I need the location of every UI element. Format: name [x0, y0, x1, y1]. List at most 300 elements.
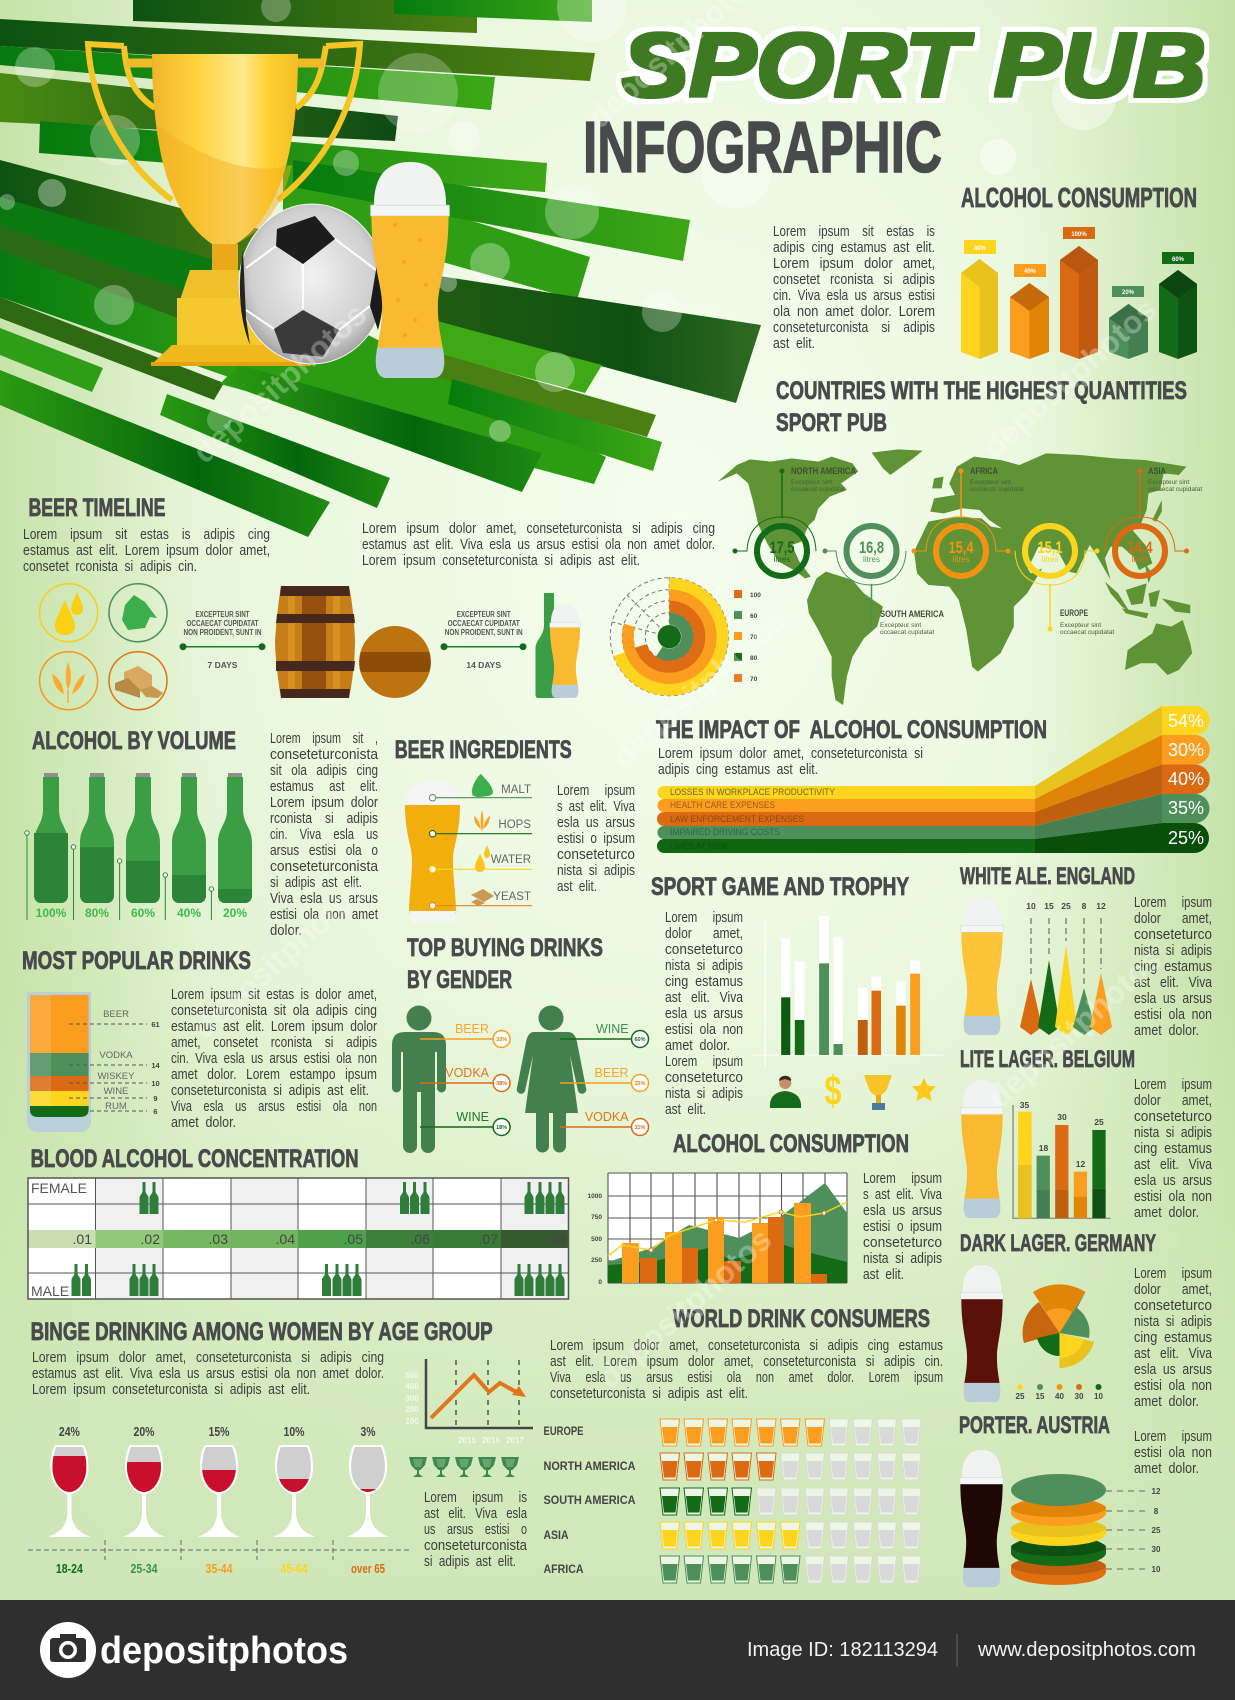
chart: mini line chart: 2017 [506, 1436, 524, 1445]
text block: lite lager: esla us arsus [1134, 1172, 1212, 1189]
chart: 3d alcohol bars: 20% [1122, 290, 1135, 296]
text block: most popular drinks: cin. Viva esla us arsus estisi ola non [171, 1050, 377, 1067]
chart: dark lager pie: 25 [1016, 1392, 1025, 1401]
chart: mini line chart [405, 1359, 533, 1445]
icon: star [912, 1078, 936, 1101]
text block: white ale: conseteturco [1134, 926, 1212, 943]
chart: 3d alcohol bars: 40% [1024, 269, 1037, 275]
text block: lite lager: amet dolor. [1134, 1204, 1199, 1221]
text block: sport game: dolor amet, [665, 925, 743, 942]
chart: impact ribbons [657, 706, 1210, 853]
text block: porter: Lorem ipsum [1134, 1428, 1212, 1445]
text block: timeline intro: Lorem ipsum conseteturconista si adipis ast elit. [362, 552, 640, 569]
chart: male drink preference: WINE [456, 1110, 489, 1124]
chart: wine glasses by age: over 65 [351, 1562, 385, 1576]
chart: drink consumers pictogram: NORTH AMERICA [544, 1461, 636, 1473]
chart: wine glasses by age: 24% [59, 1424, 80, 1439]
text block: dark lager: cing estamus [1134, 1329, 1212, 1346]
text block: binge drinking: estamus ast elit. Viva esla us arsus estisi ola non amet dolor. [32, 1365, 384, 1382]
text block: dark lager: nista si adipis [1134, 1313, 1212, 1330]
timeline label: 14 days: OCCAECAT CUPIDATAT [448, 619, 520, 628]
chart: male drink preference: 18% [496, 1125, 507, 1131]
footer bar [0, 1600, 1235, 1700]
chart: female drink preference: 60% [634, 1037, 646, 1043]
chart: world map: occaecat cupidatat [1060, 629, 1114, 636]
text block: beer ingredients [557, 782, 635, 895]
heading: top buying drinks by gender: BY GENDER [407, 966, 512, 994]
text block: most popular drinks: amet, consetet rconista si adipis [171, 1034, 377, 1051]
chart: blood alcohol table [28, 1178, 568, 1299]
chart: white ale spikes [1020, 901, 1112, 1035]
chart: blood alcohol table: .04 [276, 1231, 295, 1247]
chart: blood alcohol table: MALE [31, 1283, 69, 1299]
heading: world drink consumers: WORLD DRINK CONSUMERS [673, 1305, 930, 1333]
chart: male drink preference: VODKA [445, 1066, 490, 1080]
icon: dark lager glass [961, 1265, 1003, 1402]
text block: alcohol consumption: Lorem ipsum sit estas is [773, 223, 935, 240]
timeline label: 7 days [180, 610, 266, 670]
chart: world map: AFRICA [970, 466, 998, 476]
footer bar: depositphotos [100, 1630, 348, 1672]
watermarks: depositphotos [981, 941, 1168, 1115]
icon: porter glass [960, 1450, 1003, 1587]
text block: lite lager: ast elit. Viva [1134, 1156, 1213, 1173]
chart: mini line chart: 2015 [458, 1436, 476, 1445]
icon: green bottle [536, 593, 560, 698]
heading: countries with highest quantities: SPORT PUB [776, 409, 887, 437]
chart: impact ribbons: 25% [1168, 828, 1204, 848]
chart: blood alcohol table: .03 [209, 1231, 228, 1247]
text block: world drink consumers [550, 1337, 943, 1402]
text block: white ale: esla us arsus [1134, 990, 1212, 1007]
chart: alcohol by volume bottles: 60% [131, 906, 155, 920]
icon: person [770, 1076, 801, 1108]
text block: dark lager [1134, 1265, 1213, 1410]
text block: impact [658, 745, 923, 778]
chart: dark lager pie: 15 [1036, 1392, 1045, 1401]
chart: wine glasses by age: 18-24 [56, 1562, 83, 1576]
chart: male drink preference: 38% [496, 1081, 507, 1087]
chart: mini line chart: 500 [405, 1371, 419, 1380]
text block: dark lager: conseteturco [1134, 1297, 1212, 1314]
timeline label: 14 days: EXCEPTEUR SINT [457, 610, 511, 619]
chart: most popular drinks glass: RUM [105, 1101, 127, 1112]
text block: beer ingredients: s ast elit. Viva [557, 798, 635, 815]
text block: beer ingredients: nista si adipis [557, 862, 635, 879]
icon: lite lager glass [961, 1080, 1003, 1218]
chart: world map: SOUTH AMERICA [880, 609, 944, 619]
text block: world drink consumers: Lorem ipsum dolor amet, conseteturconista si adipis cing estamus [550, 1337, 943, 1354]
timeline label: 14 days: 14 DAYS [466, 660, 501, 670]
chart: impact ribbons: 40% [1168, 769, 1204, 789]
chart: world map: 17,5 [770, 538, 794, 557]
text block: sport game: esla us arsus [665, 1005, 743, 1022]
text block: dark lager: ast elit. Viva [1134, 1345, 1213, 1362]
chart: female drink preference: BEER [595, 1066, 629, 1080]
heading: sport game and trophy: SPORT GAME AND TROPHY [651, 873, 909, 901]
chart: wine glasses by age: 45-64 [280, 1562, 308, 1576]
chart: radial donut [610, 577, 728, 696]
text block: lite lager: Lorem ipsum [1134, 1076, 1212, 1093]
chart: blood alcohol table: .01 [73, 1231, 92, 1247]
text block: sport game: conseteturco [665, 941, 743, 958]
text block: most popular drinks: amet dolor. [171, 1114, 236, 1131]
chart: wine glasses by age [28, 1424, 410, 1576]
chart: male drink preference: BEER [455, 1022, 489, 1036]
icon: hops [109, 584, 167, 642]
chart: most popular drinks glass: 10 [151, 1079, 160, 1088]
text block: lite lager: dolor amet, [1134, 1092, 1212, 1109]
chart: 3d alcohol bars [961, 227, 1197, 359]
bokeh circles [0, 0, 1116, 442]
chart: white ale spikes: 25 [1061, 901, 1071, 911]
chart: female drink preference: WINE [596, 1022, 629, 1036]
text block: alcohol consumption: ola non amet dolor. Lorem [773, 303, 935, 320]
chart: world map: litres [1132, 555, 1148, 564]
chart: impact ribbons: IMPAIRED DRIVING COSTS [670, 827, 780, 838]
timeline label: 14 days: NON PROIDENT, SUNT IN [445, 628, 523, 637]
icon row: small trophies [409, 1457, 519, 1477]
chart: wine glasses by age: 15% [208, 1424, 230, 1439]
text block: alcohol consumption 2: conseteturco [863, 1234, 942, 1251]
chart: world map: litres [953, 555, 969, 564]
chart: most popular drinks glass: 6 [153, 1107, 158, 1116]
chart: alcohol consumption combo: 1000 [588, 1193, 602, 1200]
text block: beer timeline: Lorem ipsum sit estas is adipis cing [23, 526, 270, 543]
chart: wine glasses by age: 3% [360, 1424, 376, 1439]
text block: trophies: Lorem ipsum is [424, 1489, 527, 1506]
chart: dark lager pie [1016, 1284, 1103, 1401]
chart: world map: 15,4 [948, 538, 974, 557]
icon: water drops [40, 584, 98, 642]
text block: lite lager: cing estamus [1134, 1140, 1212, 1157]
chart: world map: litres [774, 555, 790, 564]
text block: alcohol consumption 2: Lorem ipsum [863, 1170, 942, 1187]
text block: alcohol by volume: dolor. [270, 922, 302, 939]
text block: beer ingredients: Lorem ipsum [557, 782, 635, 799]
chart: impact ribbons: HEALTH CARE EXPENSES [670, 800, 775, 811]
chart: most popular drinks glass: 14 [151, 1061, 160, 1070]
text block: dark lager: esla us arsus [1134, 1361, 1212, 1378]
chart: alcohol by volume bottles [25, 773, 252, 920]
text block: porter: amet dolor. [1134, 1460, 1199, 1477]
text block: beer timeline: estamus ast elit. Lorem ipsum dolor amet, [23, 542, 270, 559]
text block: timeline intro: Lorem ipsum dolor amet, conseteturconista si adipis cing [362, 520, 715, 537]
chart: most popular drinks glass: 61 [151, 1020, 160, 1029]
text block: most popular drinks: estamus ast elit. Lorem ipsum dolor [171, 1018, 377, 1035]
text block: trophies: ast elit. Viva esla [424, 1505, 527, 1522]
chart: dark lager pie: 40 [1055, 1392, 1064, 1401]
watermarks [186, 0, 1168, 1395]
timeline label: 7 days: 7 DAYS [208, 660, 238, 670]
labels: lite lager values: 35 [1020, 1100, 1029, 1110]
chart: beer ingredients glass: HOPS [498, 819, 531, 831]
text block: alcohol by volume: Lorem ipsum sit , [270, 730, 378, 747]
icon: yeast cubes [109, 652, 167, 710]
chart: world map: Excepteur sint [970, 479, 1011, 486]
chart: alcohol consumption combo: 500 [591, 1236, 602, 1243]
text block: binge drinking: Lorem ipsum dolor amet, conseteturconista si adipis cing [32, 1349, 384, 1366]
heading: alcohol by volume: ALCOHOL BY VOLUME [32, 727, 236, 755]
chart: impact ribbons: 54% [1168, 711, 1204, 731]
text block: alcohol consumption: conseteturconista si adipis [773, 319, 935, 336]
text block: most popular drinks: Viva esla us arsus estisi ola non [171, 1098, 377, 1115]
text block: white ale: cing estamus [1134, 958, 1212, 975]
text block: timeline intro: estamus ast elit. Viva esla us arsus estisi ola non amet dolor. [362, 536, 715, 553]
footer bar: Image ID: 182113294 [747, 1639, 938, 1661]
chart: impact ribbons: LOSSES IN WORKPLACE PRODUCTIVITY [670, 787, 836, 798]
heading: most popular drinks: MOST POPULAR DRINKS [22, 947, 251, 975]
text block: beer timeline [23, 526, 270, 575]
chart: world map: Excepteur sint [880, 622, 921, 629]
icon: depositphotos logo [40, 1622, 96, 1678]
legend: donut: 70 [750, 634, 758, 641]
chart: 3d alcohol bars: 60% [1172, 257, 1185, 263]
heading: top buying drinks by gender: TOP BUYING DRINKS [407, 934, 603, 962]
text block: sport game: nista si adipis [665, 957, 743, 974]
chart: white ale spikes: 10 [1026, 901, 1036, 911]
chart: world map: Excepteur sint [1148, 479, 1189, 486]
heading: binge drinking: BINGE DRINKING AMONG WOMEN BY AGE GROUP [31, 1318, 493, 1346]
chart: porter stacked discs: 10 [1152, 1565, 1161, 1574]
text block: sport game: nista si adipis [665, 1085, 743, 1102]
text block: sport game: conseteturco [665, 1069, 743, 1086]
icon: hero beer glass [371, 162, 449, 378]
chart: wine glasses by age: 10% [284, 1424, 305, 1439]
labels: lite lager values: 30 [1057, 1112, 1067, 1122]
text block: alcohol by volume: si adipis ast elit. [270, 874, 362, 891]
text block: impact: Lorem ipsum dolor amet, conseteturconista si [658, 745, 923, 762]
text block: alcohol consumption 2: s ast elit. Viva [863, 1186, 942, 1203]
chart: world map: EUROPE [1060, 608, 1088, 618]
text block: alcohol by volume: rconista si adipis [270, 810, 378, 827]
watermarks: depositphotos [591, 1221, 778, 1395]
text block: trophies: si adipis ast elit. [424, 1553, 516, 1570]
text block: lite lager: conseteturco [1134, 1108, 1212, 1125]
chart: mini line chart: 200 [405, 1405, 419, 1414]
text block: dark lager: dolor amet, [1134, 1281, 1212, 1298]
chart: beer ingredients glass [405, 774, 532, 923]
text block: alcohol consumption 2: nista si adipis [863, 1250, 942, 1267]
heading: beer ingredients: BEER INGREDIENTS [395, 736, 572, 764]
chart: blood alcohol table: FEMALE [31, 1180, 87, 1196]
text block: beer ingredients: ast elit. [557, 878, 597, 895]
chart: world map: litres [863, 555, 880, 564]
chart: white ale spikes: 12 [1096, 901, 1106, 911]
text block: white ale: amet dolor. [1134, 1022, 1199, 1039]
text block: alcohol by volume: estisi ola non amet [270, 906, 379, 923]
chart: blood alcohol table: .02 [141, 1231, 160, 1247]
text block: dark lager: Lorem ipsum [1134, 1265, 1212, 1282]
chart: drink consumers pictogram: ASIA [544, 1530, 568, 1542]
chart: mini line chart: 400 [405, 1382, 419, 1391]
text block: lite lager: estisi ola non [1134, 1188, 1212, 1205]
chart: world map: litres [1042, 555, 1058, 564]
icon: timeline beer glass [550, 604, 580, 698]
legend: donut: 80 [750, 655, 758, 662]
text block: alcohol by volume: arsus estisi ola o [270, 842, 378, 859]
chart: beer ingredients glass: MALT [501, 784, 531, 796]
chart: alcohol by volume bottles: 80% [85, 906, 109, 920]
heading: white ale england: WHITE ALE. ENGLAND [960, 863, 1135, 890]
panel: hero green stripes [0, 0, 761, 537]
text block: alcohol consumption [773, 223, 935, 352]
chart: world map: 16,8 [859, 538, 884, 557]
text block: sport game: estisi ola non [665, 1021, 743, 1038]
chart: alcohol consumption combo [588, 1173, 847, 1286]
text block: alcohol consumption: consetet rconista si adipis [773, 271, 935, 288]
labels: lite lager values [1020, 1100, 1104, 1169]
watermarks: depositphotos [186, 871, 373, 1045]
text block: binge drinking: Lorem ipsum conseteturconista si adipis ast elit. [32, 1381, 310, 1398]
text block: most popular drinks: amet dolor. Lorem estampo ipsum [171, 1066, 377, 1083]
chart: world map: occaecat cupidatat [880, 629, 934, 636]
timeline label: 7 days: EXCEPTEUR SINT [196, 610, 250, 619]
text block: sport game: cing estamus [665, 973, 743, 990]
text block: porter [1134, 1428, 1212, 1477]
chart: white ale spikes: 8 [1082, 901, 1087, 911]
text block: porter: estisi ola non [1134, 1444, 1212, 1461]
text block: dark lager: estisi ola non [1134, 1377, 1212, 1394]
chart: drink consumers pictogram: EUROPE [544, 1426, 584, 1438]
text block: white ale: nista si adipis [1134, 942, 1212, 959]
chart: impact ribbons: 30% [1168, 740, 1204, 760]
chart: world map: occaecat cupidatat [970, 486, 1024, 493]
chart: wine glasses by age: 20% [134, 1424, 155, 1439]
labels: lite lager values: 25 [1094, 1117, 1104, 1127]
text block: lite lager: nista si adipis [1134, 1124, 1212, 1141]
text block: beer timeline: consetet rconista si adipis cin. [23, 558, 197, 575]
chart: mini line chart: 2016 [482, 1436, 500, 1445]
text block: sport game: amet dolor. [665, 1037, 730, 1054]
chart: blood alcohol table: .05 [344, 1231, 363, 1247]
heading: porter austria: PORTER. AUSTRIA [959, 1412, 1110, 1439]
footer bar: www.depositphotos.com [977, 1639, 1196, 1661]
text block: alcohol by volume: estamus ast elit. [270, 778, 378, 795]
timeline label: 7 days: OCCAECAT CUPIDATAT [186, 619, 259, 628]
chart: blood alcohol table: .06 [411, 1231, 430, 1247]
chart: dark lager pie: 30 [1075, 1392, 1084, 1401]
text block: white ale [1134, 894, 1213, 1039]
text block: white ale: estisi ola non [1134, 1006, 1212, 1023]
chart: blood alcohol table: .07 [479, 1231, 498, 1247]
legend: donut: 70 [750, 676, 758, 683]
chart: drink consumers pictogram: SOUTH AMERICA [544, 1495, 636, 1507]
text block: most popular drinks: conseteturconista sit ola adipis cing [171, 1002, 377, 1019]
text block: trophies [424, 1489, 528, 1570]
text block: alcohol by volume: cin. Viva esla us [270, 826, 378, 843]
text block: beer ingredients: esla us arsus [557, 814, 635, 831]
chart: male drink preference [392, 1006, 510, 1153]
chart: white ale spikes: 15 [1044, 901, 1054, 911]
chart: 3d alcohol bars: 80% [974, 246, 987, 252]
icon: small trophy [864, 1075, 892, 1110]
chart: porter stacked discs: 8 [1154, 1507, 1159, 1516]
chart: world map: NORTH AMERICA [791, 466, 856, 476]
chart: female drink preference: 11% [635, 1125, 645, 1131]
chart: world map: ASIA [1148, 466, 1166, 476]
chart: beer ingredients glass: WATER [491, 854, 531, 866]
chart: most popular drinks glass: WINE [104, 1086, 128, 1097]
chart: wine glasses by age: 25-34 [130, 1562, 158, 1576]
chart: male drink preference: 33% [496, 1037, 507, 1043]
timeline label: 7 days: NON PROIDENT, SUNT IN [184, 628, 262, 637]
heading: top buying drinks by gender [407, 934, 603, 994]
text block: alcohol by volume: conseteturconista [270, 746, 379, 763]
chart: most popular drinks glass: VODKA [99, 1050, 133, 1061]
chart: dark lager pie: 10 [1094, 1392, 1103, 1401]
text block: alcohol consumption: Lorem ipsum dolor amet, [773, 255, 935, 272]
chart: world map: occaecat cupidatat [1148, 486, 1202, 493]
heading: impact of alcohol consumption: THE IMPACT OF ALCOHOL CONSUMPTION [656, 716, 1047, 744]
text block: alcohol by volume: conseteturconista [270, 858, 379, 875]
icon: white ale glass [961, 898, 1003, 1035]
labels: lite lager values: 12 [1076, 1159, 1085, 1169]
chart: world map: occaecat cupidatat [791, 486, 845, 493]
text block: alcohol consumption 2: esla us arsus [863, 1202, 942, 1219]
text block: sport game: ast elit. Viva [665, 989, 744, 1006]
chart: most popular drinks glass [27, 992, 160, 1132]
text block: alcohol consumption 2 [863, 1170, 942, 1283]
chart: porter stacked discs: 12 [1152, 1487, 1161, 1496]
chart: drink consumers pictogram [544, 1419, 921, 1583]
title: sport pub: SPORT PUB [622, 16, 1206, 116]
watermarks: depositphotos [606, 601, 793, 775]
heading: countries with highest quantities [776, 377, 1187, 437]
chart: lite lager bars [1013, 1105, 1111, 1218]
text block: white ale: ast elit. Viva [1134, 974, 1213, 991]
text block: white ale: dolor amet, [1134, 910, 1212, 927]
chart: drink consumers pictogram: AFRICA [544, 1564, 584, 1576]
chart: most popular drinks glass: 9 [153, 1094, 158, 1103]
text block: white ale: Lorem ipsum [1134, 894, 1212, 911]
text block: dark lager: amet dolor. [1134, 1393, 1199, 1410]
text block: most popular drinks: Lorem ipsum sit estas is dolor amet, [171, 986, 377, 1003]
text block: sport game: Lorem ipsum [665, 909, 743, 926]
text block: most popular drinks: conseteturconista si adipis ast elit. [171, 1082, 369, 1099]
icon: soccer ball [239, 204, 385, 364]
chart: alcohol by volume bottles: 20% [223, 906, 247, 920]
heading: lite lager belgium: LITE LAGER. BELGIUM [960, 1046, 1135, 1073]
text block: beer ingredients: estisi o ipsum [557, 830, 635, 847]
heading: beer timeline: BEER TIMELINE [28, 494, 166, 522]
icon: dollar: $ [824, 1067, 842, 1114]
text block: beer ingredients: conseteturco [557, 846, 635, 863]
text block: alcohol consumption: ast elit. [773, 335, 815, 352]
legend: donut [734, 590, 761, 683]
chart: most popular drinks glass: WISKEY [98, 1071, 135, 1082]
chart: alcohol consumption combo: 250 [591, 1257, 602, 1264]
chart: alcohol consumption combo: 0 [598, 1279, 602, 1286]
text block: most popular drinks [171, 986, 377, 1131]
chart: alcohol by volume bottles: 40% [177, 906, 201, 920]
chart: porter stacked discs: 25 [1152, 1526, 1161, 1535]
text block: sport game: ast elit. [665, 1101, 706, 1118]
chart: world map: Excepteur sint [1060, 622, 1101, 629]
icon: barrel [275, 586, 355, 698]
chart: mini line chart: 300 [405, 1394, 419, 1403]
chart: female drink preference: 35% [634, 1081, 646, 1087]
heading: blood alcohol concentration: BLOOD ALCOHOL CONCENTRATION [31, 1145, 359, 1173]
legend: donut: 100 [750, 592, 761, 599]
chart: 3d alcohol bars: 100% [1071, 232, 1087, 238]
chart: mini line chart: 100 [405, 1417, 419, 1426]
legend: donut: 60 [750, 613, 758, 620]
text block: alcohol consumption: adipis cing estamus ast elit. [773, 239, 935, 256]
chart: blood alcohol table: .08 [547, 1231, 566, 1247]
text block: alcohol by volume: Viva esla us arsus [270, 890, 378, 907]
labels: lite lager values: 18 [1039, 1143, 1048, 1153]
